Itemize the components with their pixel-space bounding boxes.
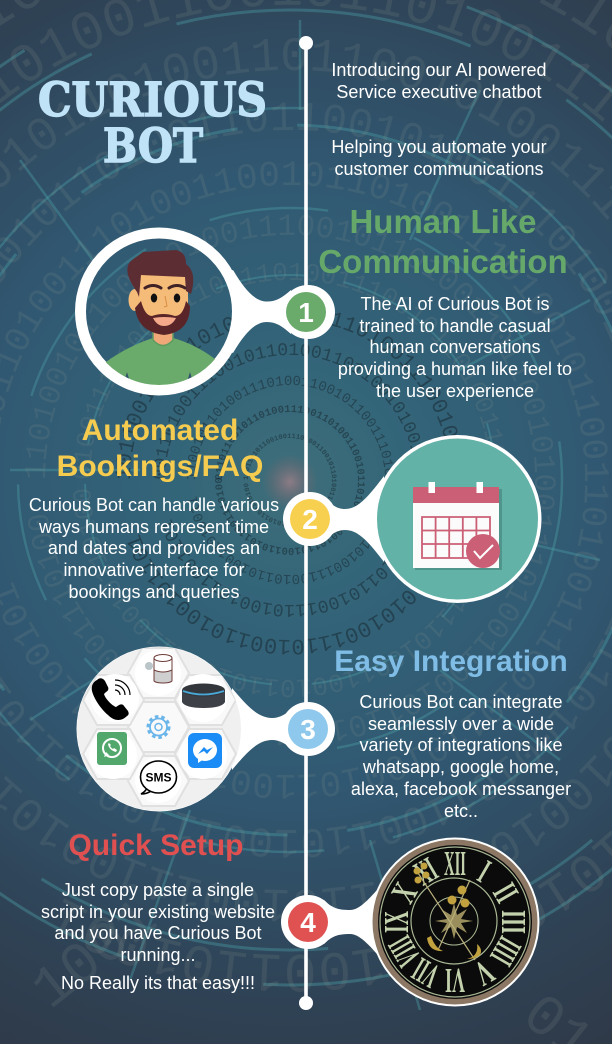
text: integration description: [351, 692, 571, 821]
text: setup description: and you have Curious Bot: [54, 923, 262, 943]
background: concentric binary digits: 1001: [21, 887, 171, 1024]
text: bookings description: bookings and queries: [68, 582, 240, 602]
background: concentric binary digits: 101100100111010010110011010011100101101001101100101001110100110100101101: [116, 312, 458, 654]
icon: antique clock: X: [383, 876, 425, 909]
number 4: [288, 902, 328, 942]
icon: antique clock: V: [468, 952, 501, 994]
heading: quick setup: Quick Setup: [68, 829, 244, 862]
background: concentric binary digits: 110010110100111010011001011001110100101100110100111001011010011010011: [186, 376, 393, 584]
number 2: 2: [302, 504, 318, 535]
timeline axis: [299, 36, 313, 1010]
text: integration description: etc..: [444, 801, 478, 821]
icon: whatsapp: [97, 732, 127, 765]
background: concentric binary digits: 110100101100110100111001011010011011001010011101001100101101001100101101001110100: [25, 214, 556, 746]
text: bookings description: ways humans represent time: [39, 517, 269, 537]
heading: easy integration: Easy Integration: [334, 645, 568, 678]
background: concentric binary digits: 10011010110010011101001100101101001110010110100110101100110100: [243, 433, 336, 526]
heading: automated bookings: [57, 414, 263, 483]
icon: settings gear: [148, 716, 169, 738]
icon: sms bubble: SMS: [145, 770, 172, 784]
icon: bearded man avatar: [106, 250, 215, 385]
title: [38, 73, 267, 174]
heading: automated bookings: Automated: [82, 414, 238, 447]
number 2: [290, 499, 330, 539]
icon: antique clock: IIII: [482, 930, 529, 972]
icon: messenger: [188, 733, 222, 768]
intro text: [331, 60, 547, 102]
icon: alexa echo dot: [182, 684, 225, 708]
icon: antique clock: II: [485, 877, 526, 909]
text: setup description: running... No Really its that easy!!!: [61, 945, 255, 993]
icon: google home speaker: [145, 654, 172, 683]
text: setup description: Just copy paste a single: [62, 880, 254, 900]
background: concentric binary digits: 001101001110010110100110110010100111010011001011010011101001011001101: [154, 343, 420, 617]
text: integration description: alexa, facebook messanger: [351, 779, 571, 799]
text: integration description: Curious Bot can integrate: [359, 692, 563, 712]
icon: sms bubble: [140, 761, 176, 794]
icon: hexagon integrations grid: [77, 647, 241, 811]
text: bookings description: Curious Bot can handle various: [29, 495, 279, 515]
number 3: [288, 709, 328, 749]
intro text: Introducing our AI powered: [331, 60, 547, 80]
text: human like description: providing a human like feel to: [338, 359, 572, 379]
icon: calendar: [413, 482, 502, 570]
icon: phone handset: [92, 678, 130, 720]
text: bookings description: and dates and provides an: [48, 538, 260, 558]
text: integration description: seamlessly over a wide: [368, 714, 554, 734]
text: setup description: script in your existing website: [41, 902, 275, 922]
timeline graphics: [39, 36, 542, 1010]
heading: human like communication: Communication: [318, 243, 568, 280]
text: human like description: trained to handle casual: [359, 316, 551, 336]
number 3: 3: [300, 714, 316, 745]
helper text: customer communications: [334, 159, 544, 179]
text: integration description: whatsapp, google home,: [363, 757, 559, 777]
text: bookings description: [29, 495, 279, 602]
heading: automated bookings: Bookings/FAQ: [57, 450, 263, 483]
step 1: avatar node: [80, 233, 335, 400]
icon: antique clock: XI: [407, 849, 444, 893]
number 1: 1: [298, 297, 314, 328]
icon: antique clock: VI: [445, 961, 465, 1000]
icon: antique clock: VII: [406, 950, 446, 996]
heading: human like communication: [318, 203, 568, 280]
text: bookings description: innovative interface for: [63, 560, 245, 580]
icon: antique clock: [372, 840, 538, 1004]
icon: antique clock: IX: [377, 911, 416, 933]
icon: antique clock: I: [471, 853, 497, 890]
helper text: Helping you automate your: [331, 137, 547, 157]
text: human like description: The AI of Curious Bot is: [360, 294, 550, 314]
text: human like description: the user experience: [376, 381, 534, 401]
icon: antique clock: VIII: [380, 929, 428, 973]
step 4: clock node: [281, 838, 540, 1006]
intro text: Service executive chatbot: [336, 82, 542, 102]
icon: antique clock: III: [494, 910, 533, 934]
title: CURIOUS: [38, 73, 267, 128]
step 3: integrations node: [76, 646, 335, 812]
title: BOT: [103, 119, 203, 174]
number 1: [286, 292, 326, 332]
text: human like description: human conversations: [369, 337, 541, 357]
icon: antique clock: XII: [444, 844, 466, 883]
step 2: calendar node: [283, 435, 542, 603]
text: integration description: variety of integrations like: [359, 735, 563, 755]
number 4: 4: [300, 907, 316, 938]
text: human like description: [338, 294, 572, 401]
text: setup description: [41, 880, 275, 993]
background: concentric binary digits: 01101100101101001110011010011001011010011100101101001101011001110100101: [215, 405, 365, 555]
helper text: [331, 137, 547, 179]
heading: human like communication: Human Like: [349, 203, 537, 240]
